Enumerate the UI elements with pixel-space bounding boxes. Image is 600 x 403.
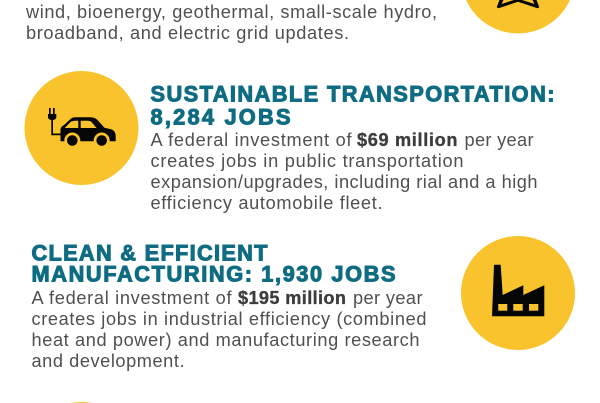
text block: sustainable transportation description: expansion/upgrades, including rial and a high: [150, 172, 538, 192]
text block: manufacturing description: [32, 288, 426, 371]
text block: manufacturing description: creates jobs in industrial efficiency (combined: [32, 309, 426, 329]
text block: renewable energy description (end): [25, 2, 437, 43]
heading: clean and efficient manufacturing: [32, 241, 396, 287]
icon: factory in yellow circle: [461, 236, 575, 350]
text block: renewable energy description (end): wind, bioenergy, geothermal, small-scale hydro,: [25, 2, 437, 22]
car body: [60, 117, 116, 141]
text block: manufacturing description: per year: [353, 288, 422, 308]
text block: manufacturing description: $195 million: [238, 288, 346, 308]
car windows: [65, 121, 96, 128]
heading: sustainable transportation: 8,284 JOBS: [150, 105, 290, 130]
text block: sustainable transportation description: $69 million: [357, 130, 458, 150]
text block: manufacturing description: and development.: [32, 351, 184, 371]
text block: sustainable transportation description: [150, 130, 538, 213]
icon: next yellow circle (cropped): [71, 401, 92, 403]
text block: manufacturing description: A federal investment of: [32, 288, 232, 308]
heading: clean and efficient manufacturing: MANUFACTURING: 1,930 JOBS: [32, 262, 396, 287]
text block: renewable energy description (end): broadband, and electric grid updates.: [26, 23, 349, 43]
text block: sustainable transportation description: efficiency automobile fleet.: [150, 193, 382, 213]
heading: clean and efficient manufacturing: CLEAN & EFFICIENT: [32, 241, 268, 266]
text block: sustainable transportation description: per year: [464, 130, 534, 150]
text block: manufacturing description: heat and power) and manufacturing research: [32, 330, 420, 350]
plug and cord: [48, 108, 61, 135]
text block: sustainable transportation description: creates jobs in public transportation: [150, 151, 464, 171]
icon: star in yellow circle: [466, 0, 570, 33]
wheels: [64, 132, 80, 148]
text block: sustainable transportation description: A federal investment of: [150, 130, 352, 150]
heading: sustainable transportation: [150, 82, 554, 130]
icon: electric car in yellow circle: [24, 71, 138, 185]
heading: sustainable transportation: SUSTAINABLE TRANSPORTATION:: [150, 82, 554, 107]
